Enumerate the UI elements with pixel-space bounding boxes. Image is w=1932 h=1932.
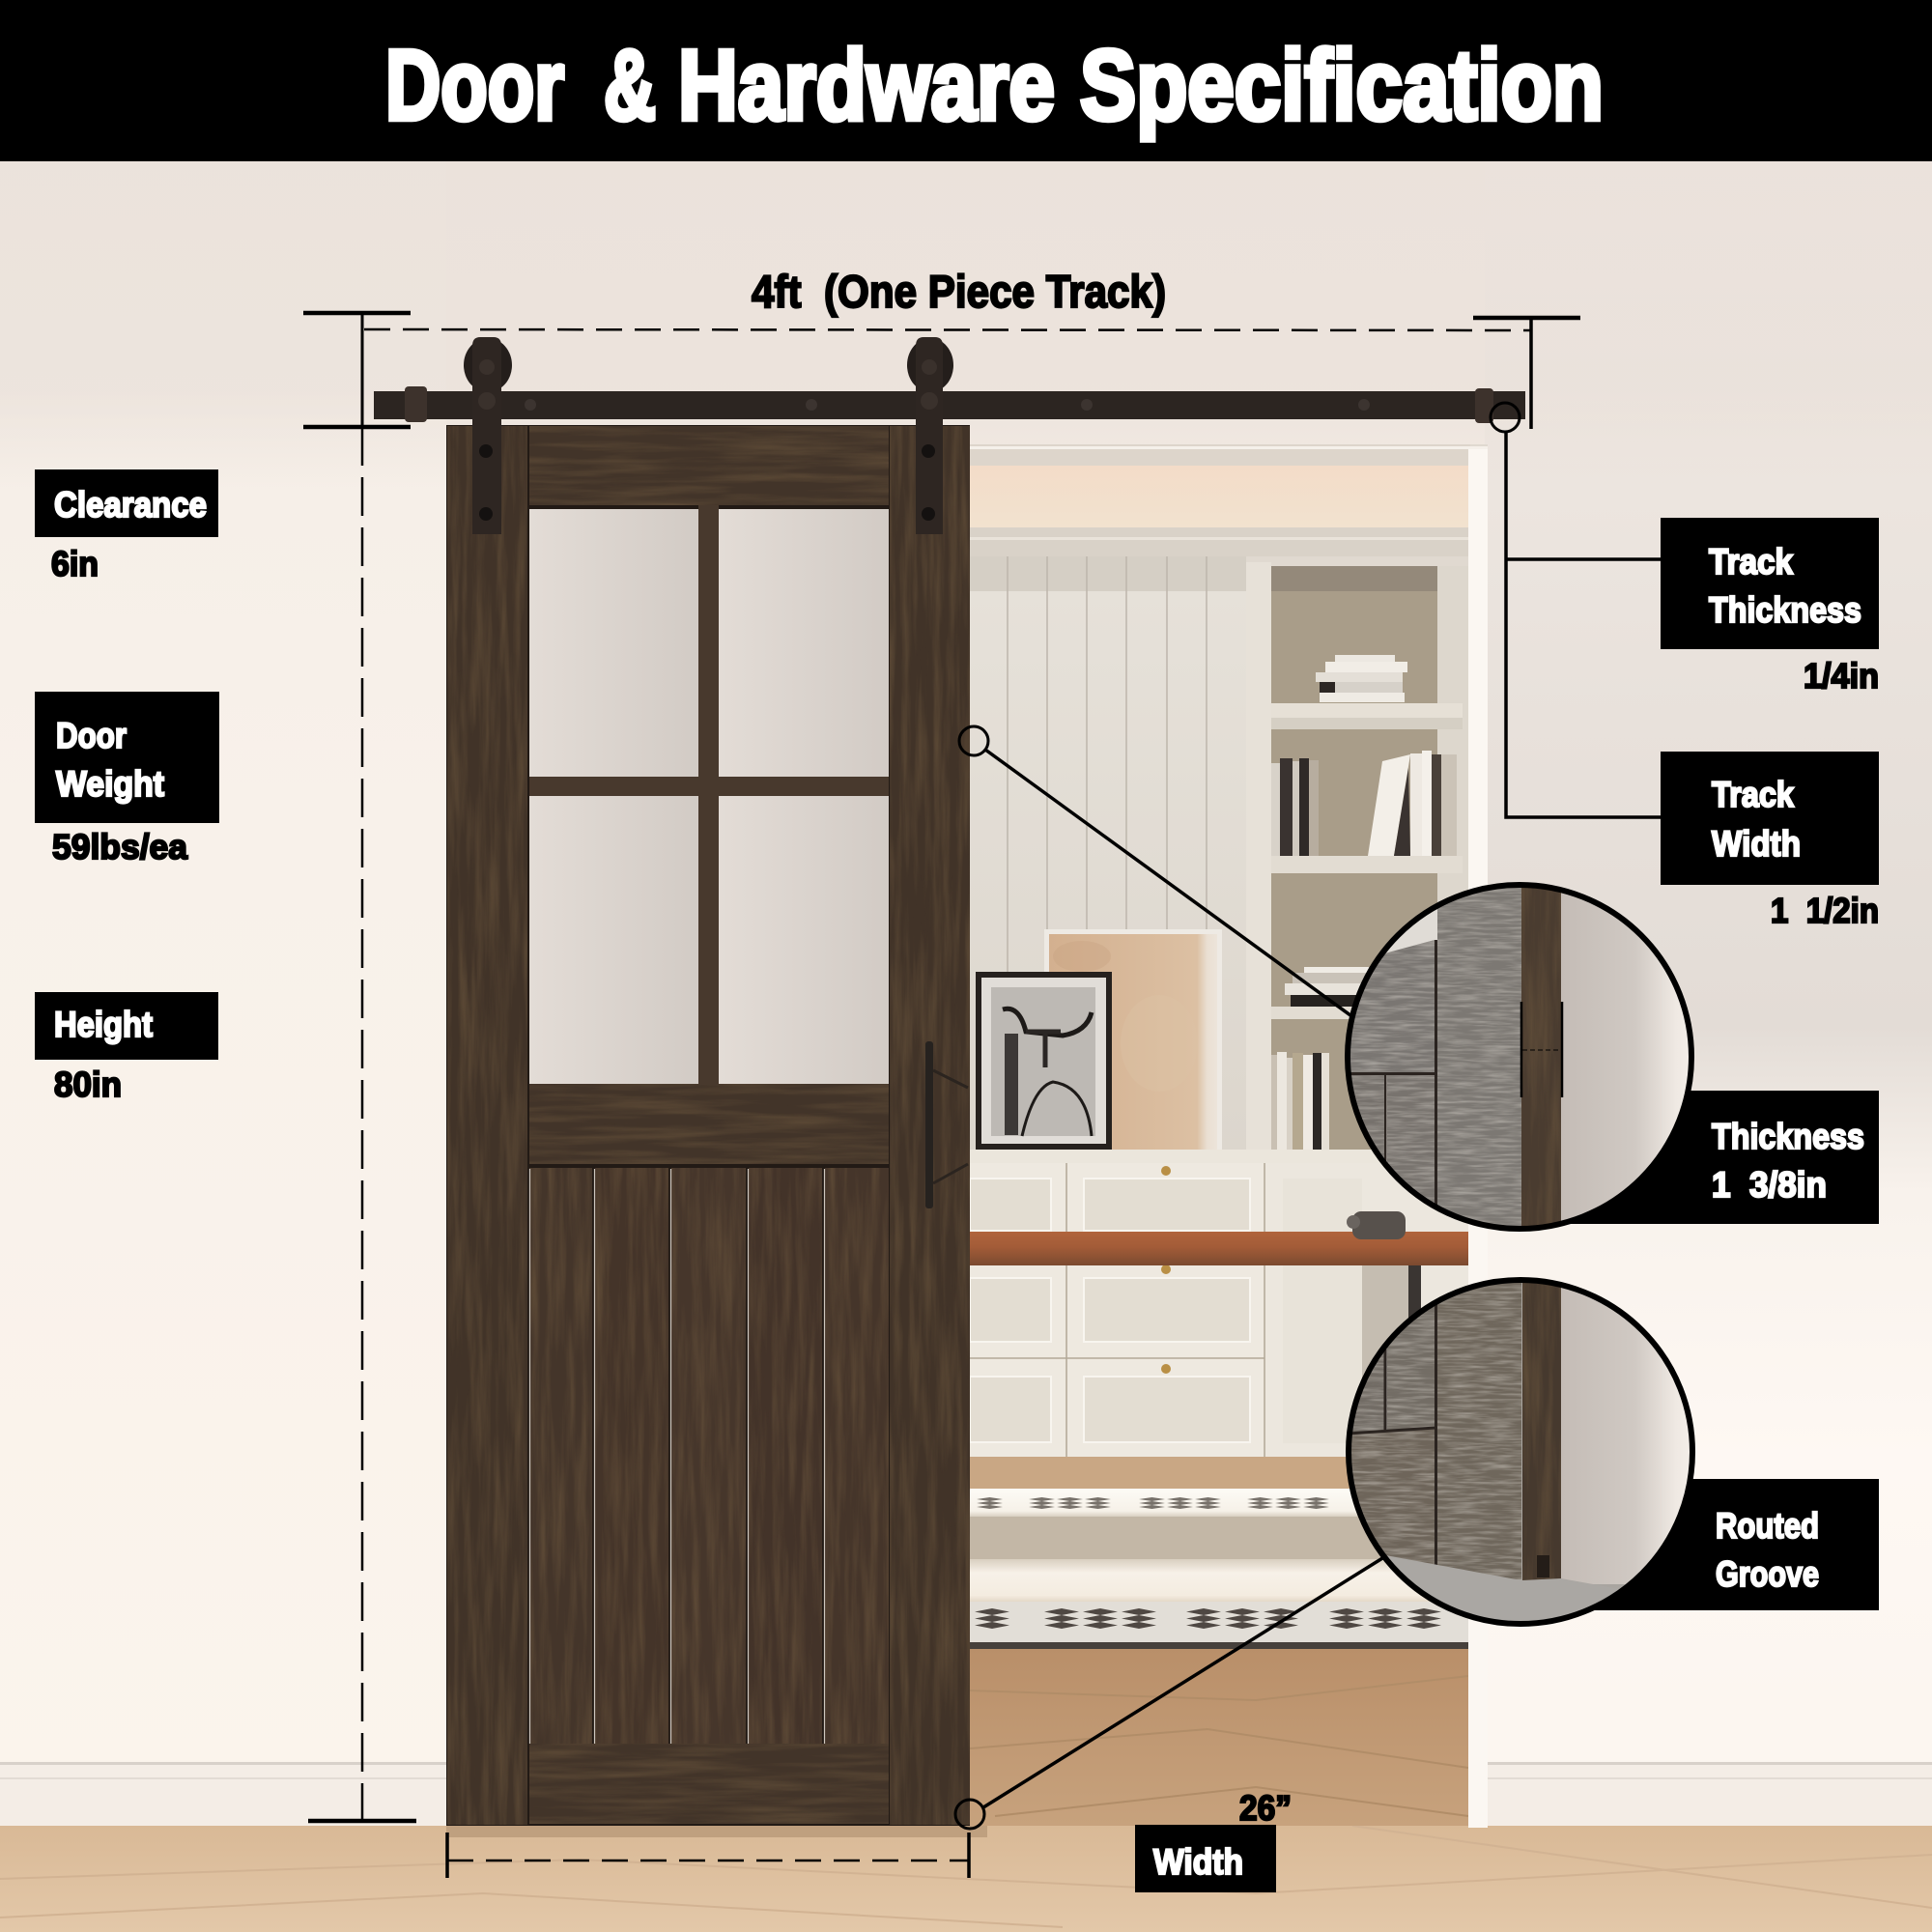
glass panes [529,509,889,1084]
framed abstract art [1044,929,1222,1150]
books: second shelf [1271,751,1457,856]
right hanger [907,337,953,534]
bowl on desk [1347,1211,1406,1239]
width label [1135,1788,1292,1892]
door weight label: Weight [56,764,164,804]
track rail [374,386,1525,423]
cabinets [970,1150,1469,1457]
track length label: 4ft (One Piece Track) [752,266,1166,317]
track thickness label: 1/4in [1804,656,1879,696]
callout line to thickness detail [959,726,1354,1018]
thickness ticks [1521,1002,1562,1097]
wooden desk [970,1232,1468,1265]
barn door [446,425,970,1826]
white door frame [970,446,1488,1828]
beadboard wall [970,556,1246,1151]
track thickness label: Track [1709,542,1793,582]
track width label: 1 1/2in [1771,891,1879,930]
books: stack on top shelf [1316,655,1407,702]
bookcase [1246,562,1468,1151]
left hanger [464,337,512,534]
height label [35,992,218,1104]
window muntins [529,505,889,1085]
callout line to routed groove detail [955,1555,1387,1829]
floor and rug in room [970,1457,1468,1826]
door weight label: 59lbs/ea [52,827,188,867]
thickness label: Thickness [1712,1117,1864,1156]
clearance label [35,469,218,583]
door stiles [447,426,970,1825]
door height dimension [303,313,416,1821]
thickness label [1507,1091,1879,1224]
magnifier: door thickness [1338,879,1696,1239]
title text: & [604,29,656,141]
height label: Height [54,1005,153,1044]
routed groove label [1507,1479,1879,1610]
width dimension [447,1833,969,1878]
width label: Width [1153,1842,1243,1882]
title banner [0,0,1932,161]
track width label: Width [1712,824,1801,864]
track width label: Track [1712,775,1794,814]
clearance label: Clearance [54,485,207,525]
magnifier: routed groove [1333,1275,1700,1642]
ceiling trim and lit cove [970,444,1470,556]
books: fourth shelf [1271,1052,1329,1150]
baseboards [0,1762,1932,1826]
track thickness label [1661,518,1879,696]
vertical planks [529,1168,889,1744]
clearance label: 6in [51,544,99,583]
door weight label: Door [56,716,127,755]
books: third shelf [1285,967,1369,1007]
title text: Specification [1080,29,1604,141]
track width label [1661,752,1879,930]
thickness label: 1 3/8in [1712,1165,1827,1205]
door pull handle [925,1041,968,1208]
title text: Door [385,29,564,141]
door rails [529,426,889,1824]
wood floor [0,1824,1932,1932]
door weight label [35,692,219,867]
routed groove label: Groove [1716,1554,1819,1594]
title text: Hardware [678,29,1055,141]
room behind the door [970,444,1488,1828]
track leader lines [1491,403,1662,817]
width label: 26” [1239,1788,1292,1828]
track thickness label: Thickness [1709,590,1861,630]
routed groove label: Routed [1716,1506,1819,1546]
height label: 80in [54,1065,122,1104]
framed bicycle photo [976,972,1112,1150]
